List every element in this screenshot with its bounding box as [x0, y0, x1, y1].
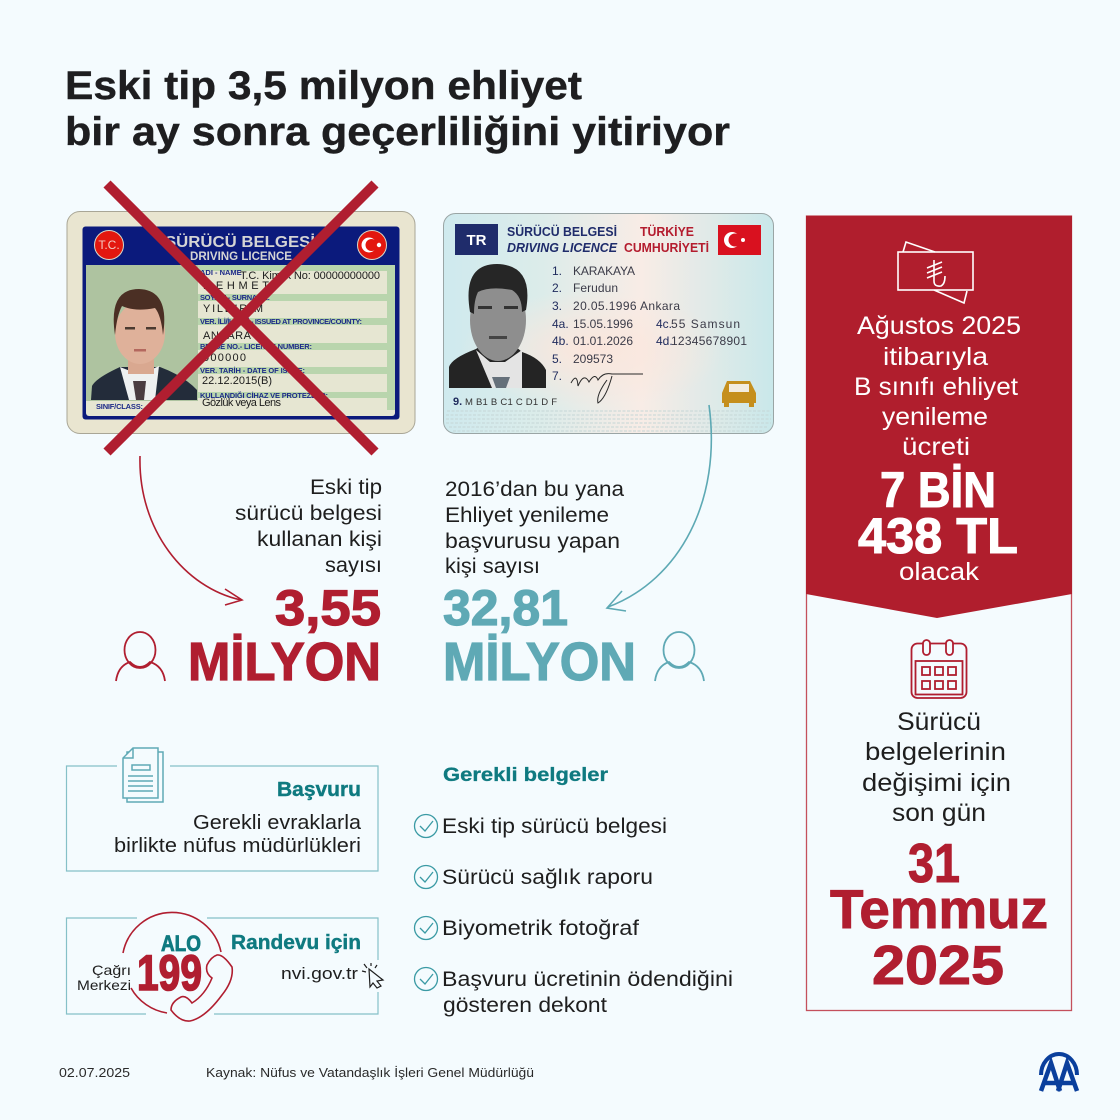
panel: fee and deadline column: belgelerinin — [865, 738, 1006, 766]
icon: calendar — [912, 640, 966, 698]
red cross over old card — [107, 184, 375, 452]
new licence card: 9. — [453, 396, 462, 408]
panel: fee and deadline column: 2025 — [872, 934, 1004, 996]
new licence card — [444, 214, 774, 434]
list: required documents: Başvuru ücretinin ödendiğini — [442, 968, 733, 991]
logo: AA — [1041, 1054, 1077, 1091]
panel: application box: Gerekli evraklarla — [193, 812, 362, 834]
new licence card: 55 Samsun — [671, 317, 740, 331]
old licence card: 000000 — [203, 352, 246, 364]
icon: banknotes — [898, 242, 973, 303]
panel: application box — [66, 748, 378, 871]
panel: fee and deadline column: Sürücü — [897, 708, 981, 736]
number: 3,55 milyon — [188, 580, 381, 692]
new licence card: 4a. — [552, 317, 569, 331]
panel: appointment box: 199 — [137, 945, 202, 1001]
list: required documents: Biyometrik fotoğraf — [442, 917, 639, 940]
text: new licence applicants — [445, 478, 624, 578]
number: 32,81 milyon: MİLYON — [443, 632, 636, 692]
panel: fee and deadline column: yenileme — [882, 403, 988, 431]
text: new licence applicants: başvurusu yapan — [445, 530, 620, 553]
new licence card: KARAKAYA — [573, 264, 635, 278]
old licence card — [67, 212, 415, 434]
list: required documents: gösteren dekont — [443, 994, 607, 1017]
panel: fee and deadline column: 438 TL — [858, 508, 1018, 564]
panel: fee and deadline column: Temmuz — [830, 878, 1048, 940]
panel: fee and deadline column: B sınıfı ehliyet — [854, 373, 1018, 401]
panel: fee and deadline column: olacak — [899, 558, 980, 586]
old licence card: ADI - NAME — [200, 268, 242, 277]
panel: application box: Başvuru — [277, 779, 361, 801]
new licence card: M B1 B C1 C D1 D F — [465, 397, 557, 408]
old licence card: T.C. — [98, 238, 120, 252]
panel: fee and deadline column: 7 BİN — [880, 462, 996, 518]
panel: fee and deadline column: ücreti — [902, 433, 970, 461]
panel: appointment box: ALO — [161, 931, 201, 956]
old licence card: ANKARA — [203, 330, 252, 342]
old licence card: MEHMET — [203, 280, 269, 292]
new licence card: SÜRÜCÜ BELGESİ — [507, 224, 617, 239]
text: old licence users: sürücü belgesi — [235, 502, 382, 525]
text: old licence users — [235, 476, 382, 577]
icon: call centre circle and phone — [123, 912, 232, 1021]
new licence card: 01.01.2026 — [573, 334, 633, 348]
list: required documents — [414, 814, 733, 1017]
text: new licence applicants: kişi sayısı — [445, 555, 540, 578]
number: 3,55 milyon: MİLYON — [188, 632, 381, 692]
icon: cursor — [362, 963, 383, 988]
panel: appointment box: Merkezi — [77, 977, 131, 993]
title: bir ay sonra geçerliliğini yitiriyor — [65, 110, 730, 154]
new licence card: 15.05.1996 — [573, 317, 633, 331]
new licence card: 3. — [552, 299, 562, 313]
arrow: new card to 32,81 milyon — [607, 405, 711, 611]
new licence card: 4b. — [552, 334, 569, 348]
number: 3,55 milyon: 3,55 — [275, 580, 381, 636]
footer date: 02.07.2025 — [59, 1066, 130, 1080]
new licence card: TÜRKİYE — [640, 224, 694, 239]
new licence card: 5. — [552, 352, 562, 366]
panel: appointment box — [66, 912, 383, 1021]
old licence card: SOYADI - SURNAME: — [200, 293, 270, 302]
new licence card: 20.05.1996 Ankara — [573, 299, 680, 313]
footer source: Kaynak: Nüfus ve Vatandaşlık İşleri Genel Müdürlüğü — [206, 1066, 534, 1080]
old licence card: 22.12.2015(B) — [202, 375, 272, 387]
number: 32,81 milyon — [443, 580, 636, 692]
old licence card: KULLANDIĞI CİHAZ VE PROTEZLER: — [200, 391, 328, 400]
old licence card: SÜRÜCÜ BELGESİ — [165, 232, 315, 251]
old licence card: T.C. Kimlik No: 00000000000 — [240, 270, 380, 282]
old licence card: BELGE NO.- LICENCE NUMBER: — [200, 342, 312, 351]
panel: fee and deadline column: Ağustos 2025 — [857, 312, 1021, 340]
new licence card: CUMHURİYETİ — [624, 240, 709, 255]
panel: fee and deadline column: değişimi için — [862, 769, 1011, 797]
new licence card: Ferudun — [573, 281, 618, 295]
new licence card: 4d. — [656, 334, 673, 348]
panel: appointment box: Randevu için — [231, 932, 361, 954]
heading: required documents: Gerekli belgeler — [443, 765, 609, 786]
title: Eski tip 3,5 milyon ehliyet — [65, 64, 582, 108]
panel: red fee block — [806, 216, 1072, 618]
old licence card: Gözlük veya Lens — [202, 397, 282, 409]
arrow: old card to 3,55 milyon — [140, 456, 242, 605]
number: 32,81 milyon: 32,81 — [443, 580, 568, 636]
old licence card: VER. TARİH - DATE OF ISSUE: — [200, 366, 305, 375]
new licence card: DRIVING LICENCE — [507, 240, 617, 255]
new licence card: 4c. — [656, 317, 672, 331]
text: old licence users: Eski tip — [310, 476, 382, 499]
text: new licence applicants: 2016’dan bu yana — [445, 478, 624, 501]
old licence card: VER. İLİ/İLÇESİ - ISSUED AT PROVINCE/COUNTY: — [200, 317, 362, 326]
panel: appointment box: Çağrı — [92, 962, 131, 978]
list: required documents: Sürücü sağlık raporu — [442, 866, 653, 889]
new licence card: 7. — [552, 369, 562, 383]
title — [65, 64, 730, 154]
old licence card: SINIF/CLASS: — [96, 402, 143, 411]
old licence card: DRIVING LICENCE — [190, 251, 292, 263]
panel: fee and deadline column: itibarıyla — [883, 343, 988, 371]
text: new licence applicants: Ehliyet yenileme — [445, 504, 609, 527]
icon: person red — [116, 632, 165, 681]
icon: document — [123, 748, 163, 802]
text: old licence users: sayısı — [325, 554, 382, 577]
new licence card: TR — [466, 232, 487, 249]
panel: fee and deadline column: 31 — [908, 832, 960, 894]
list: required documents: Eski tip sürücü belgesi — [442, 815, 667, 838]
panel: appointment box: nvi.gov.tr — [281, 964, 358, 983]
icon: person teal — [655, 632, 704, 681]
new licence card: 2. — [552, 281, 562, 295]
panel: fee and deadline column: son gün — [892, 799, 986, 827]
new licence card: 209573 — [573, 352, 613, 366]
new licence card: 12345678901 — [671, 334, 747, 348]
old licence card: YILDIRIM — [203, 303, 263, 315]
panel: fee and deadline column — [806, 216, 1072, 1010]
new licence card: 1. — [552, 264, 562, 278]
text: old licence users: kullanan kişi — [257, 528, 382, 551]
panel: application box: birlikte nüfus müdürlükleri — [114, 835, 361, 857]
